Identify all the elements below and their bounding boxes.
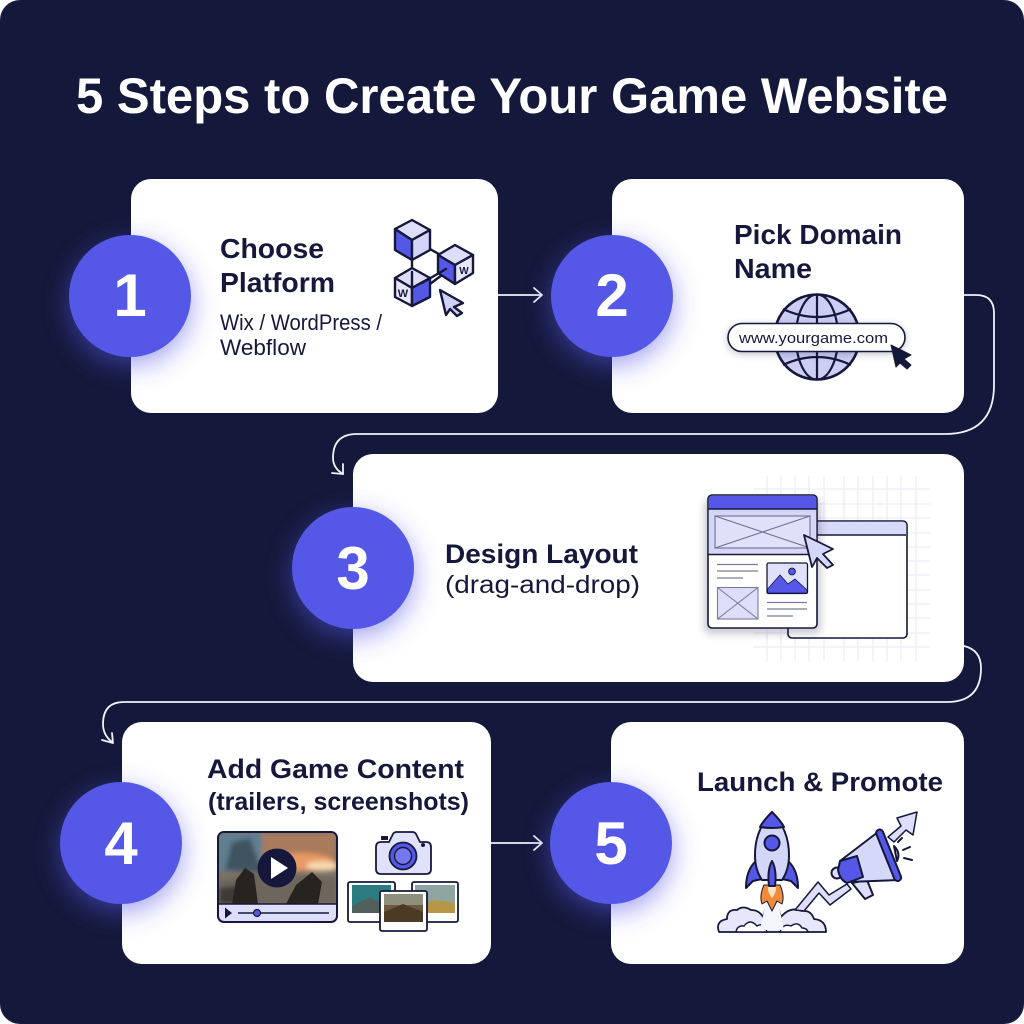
icon: drag cursor [804, 535, 833, 568]
icon: camera [376, 832, 431, 874]
arrow: step 1 to step 2 [498, 288, 542, 302]
title: 5 Steps to Create Your Game Website [76, 68, 948, 124]
step 4 heading: Add Game Content [207, 754, 464, 784]
icon: globe [774, 294, 860, 380]
step 4 description: (trailers, screenshots) [208, 788, 469, 816]
step 3 heading: Design Layout [445, 539, 638, 569]
badge: step 1 [69, 235, 191, 364]
icon: smoke cloud [718, 900, 826, 932]
icon: black cursor [891, 345, 911, 369]
step 1 description: Wix / WordPress / [220, 310, 383, 335]
badge: step 2: 2 [595, 262, 629, 329]
badge: step 3: 3 [336, 535, 370, 602]
front browser wireframe [704, 495, 821, 634]
screenshot photos [348, 882, 458, 931]
panel: step 3 design layout [353, 454, 964, 682]
panel: step 5 launch and promote [611, 722, 964, 964]
domain url bar [727, 324, 906, 354]
step 2 heading: Pick Domain [734, 219, 902, 250]
step 5 heading: Launch & Promote [697, 767, 943, 797]
step 1 description: Webflow [220, 335, 306, 360]
icon: growth arrow [795, 812, 917, 911]
step 1 heading: Choose [220, 233, 324, 264]
step 1 heading: Platform [220, 267, 335, 298]
layout grid backdrop [753, 476, 930, 661]
icon: connected cubes with cursor: W [459, 266, 469, 277]
domain url bar: www.yourgame.com [738, 331, 888, 347]
icon: connected cubes with cursor [395, 220, 473, 316]
panel: step 2 pick domain name [612, 179, 964, 413]
arrow: step 4 to step 5 [491, 836, 542, 850]
panel: step 4 add game content [122, 722, 491, 964]
step 3 description: (drag-and-drop) [445, 571, 640, 599]
arrow: step 2 to step 3 [332, 295, 994, 474]
icon: megaphone [832, 828, 912, 899]
badge: step 3 [292, 507, 414, 636]
back browser window [788, 521, 907, 638]
panel: step 1 choose platform [131, 179, 498, 413]
badge: step 5 [550, 782, 672, 911]
icon: flame [761, 885, 783, 911]
badge: step 1: 1 [113, 262, 147, 329]
step 2 heading: Name [734, 253, 812, 284]
logo letters on cubes: W [398, 288, 409, 300]
video player [218, 832, 338, 922]
badge: step 2 [551, 235, 673, 364]
arrow: step 3 to step 4 [102, 646, 981, 743]
badge: step 4 [60, 782, 182, 911]
badge: step 5: 5 [594, 810, 628, 877]
badge: step 4: 4 [104, 810, 138, 877]
icon: rocket [746, 812, 798, 888]
